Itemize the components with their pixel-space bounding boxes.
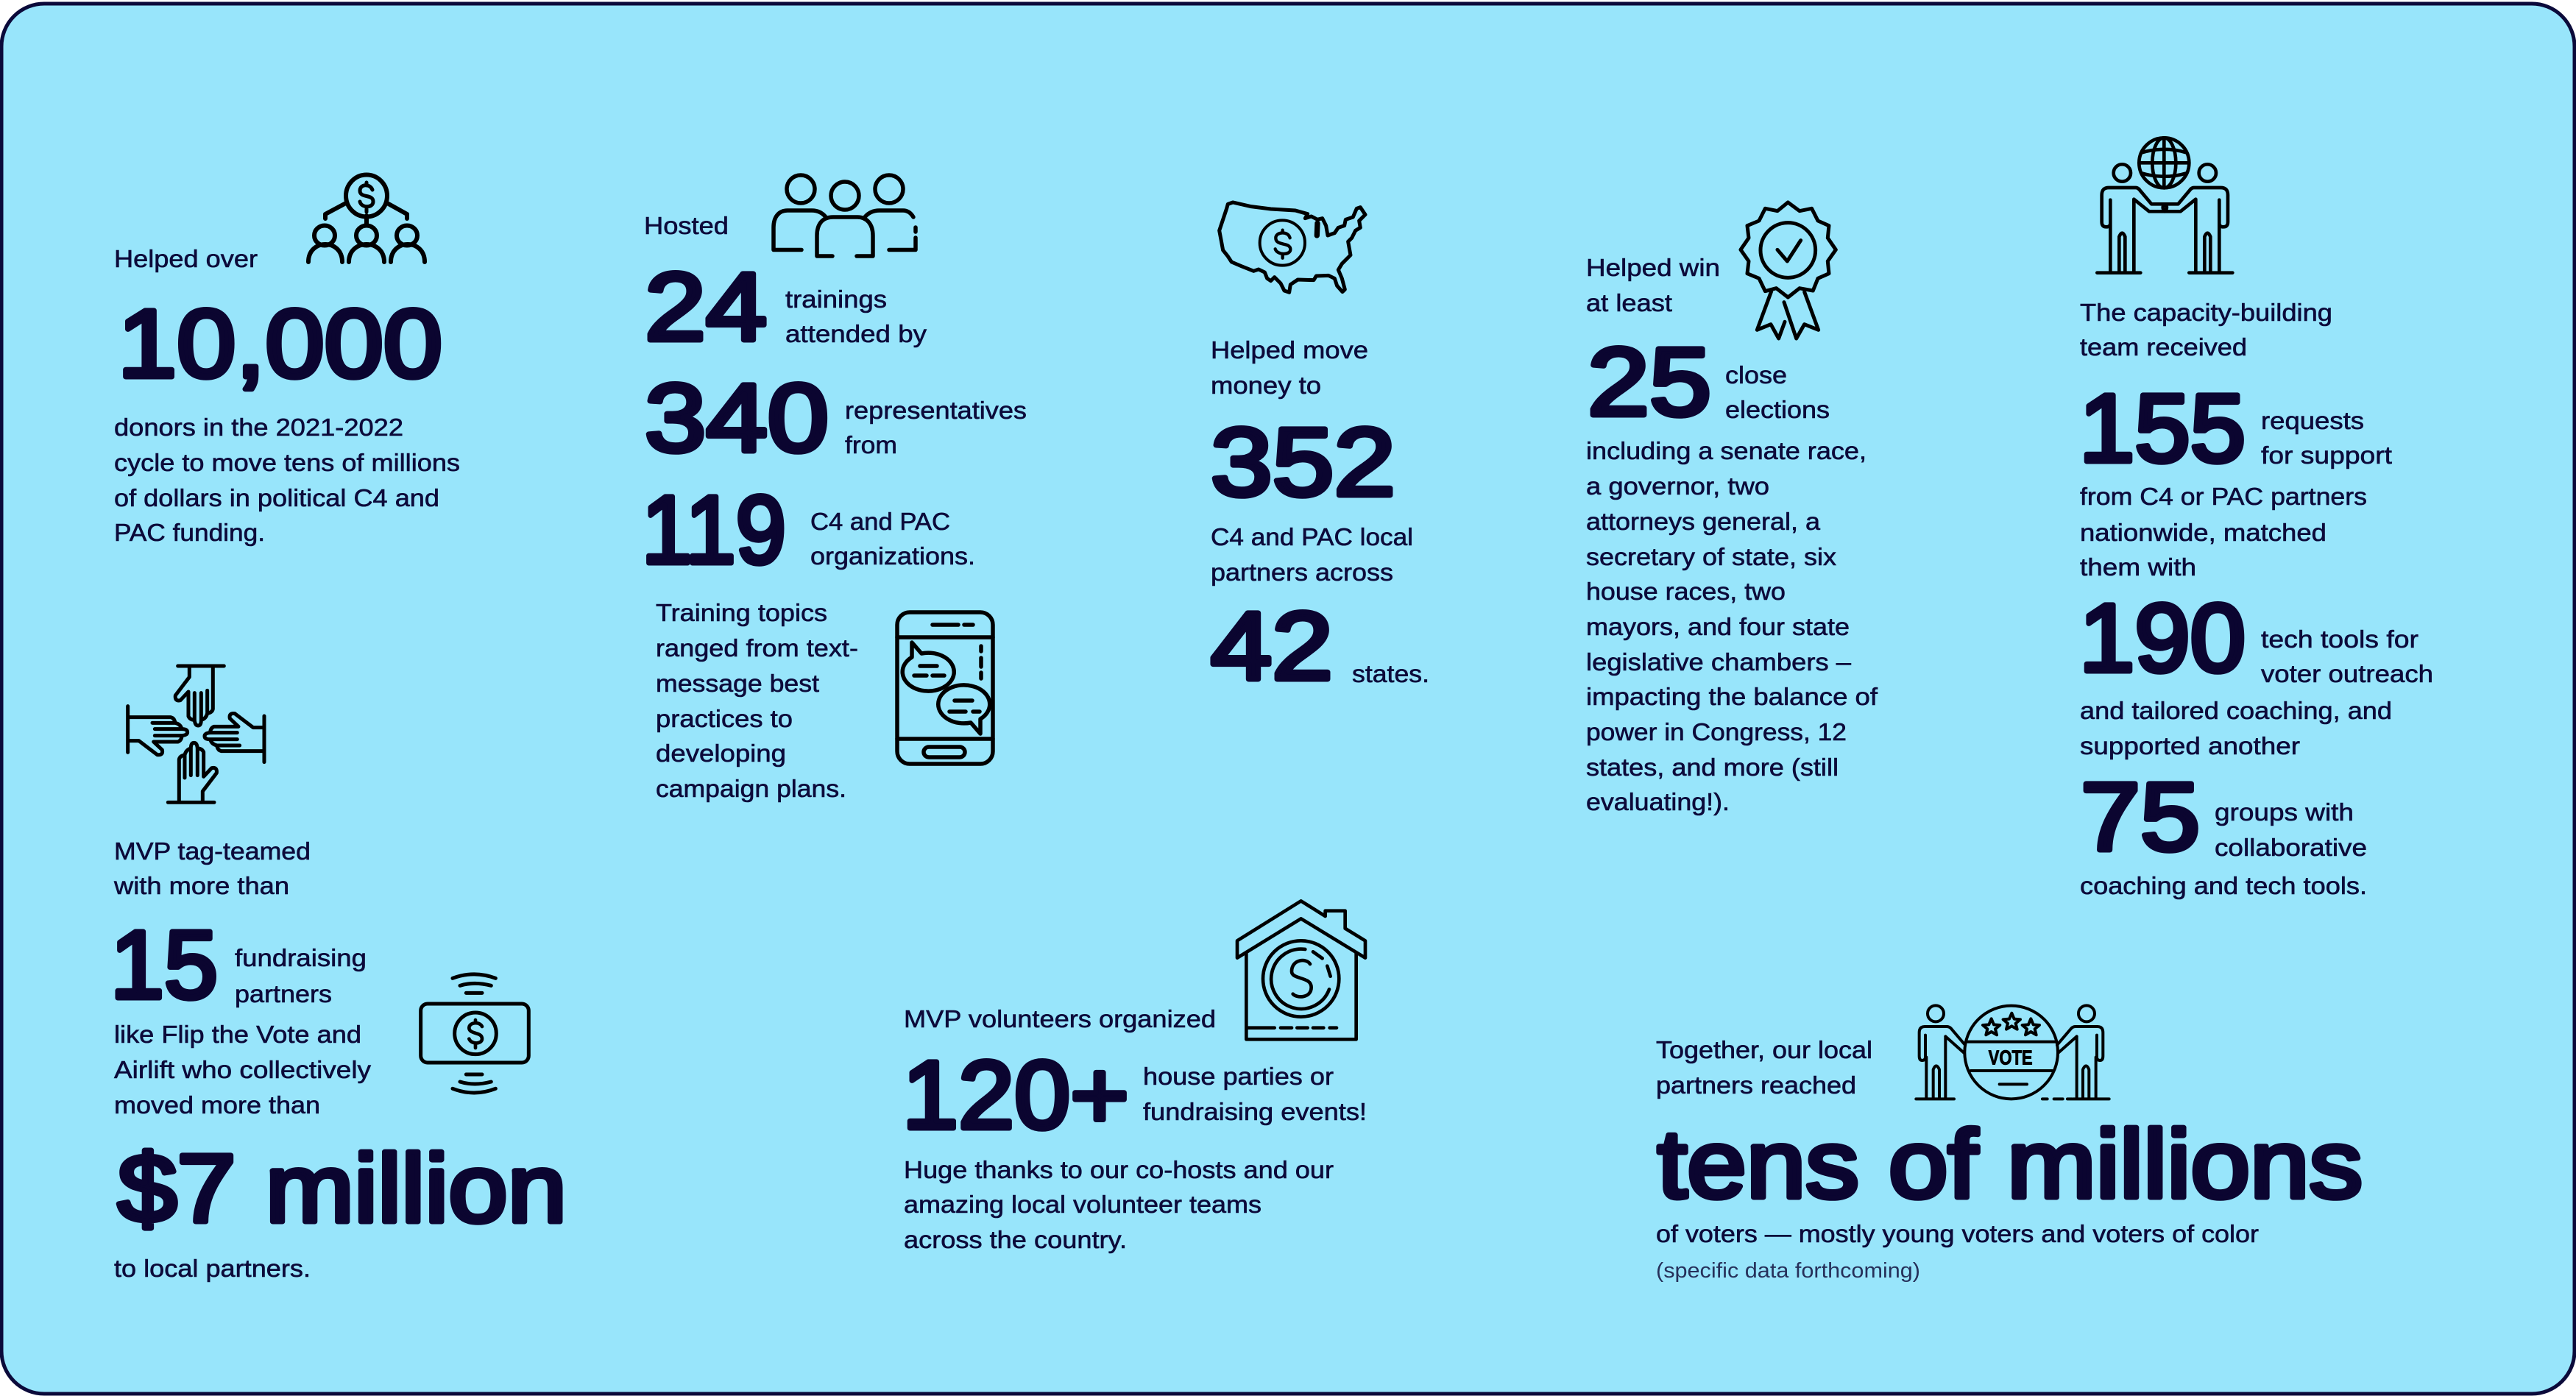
text: flip the vote	[114, 1021, 372, 1119]
text: from partners: nationwide, matched	[2080, 519, 2326, 546]
number: 340: 340	[645, 364, 829, 472]
block: house parties	[902, 901, 1367, 1253]
number: $7 million: $7 million	[118, 1134, 567, 1242]
text: tech tools for voter outreach: tech tools for	[2261, 626, 2418, 653]
text: training topics: message best	[656, 670, 819, 697]
text: tailored coaching: and tailored coaching, and	[2080, 697, 2392, 724]
text: MVP tag-teamed: with more than	[113, 872, 289, 899]
icon: donors with dollar coin	[308, 175, 425, 262]
text: donors description: PAC funding.	[114, 519, 265, 546]
text: from partners	[2080, 483, 2367, 581]
text: states: states.	[1352, 660, 1429, 687]
number: 190: 190	[2079, 584, 2246, 692]
text: specific data forthcoming: (specific data forthcoming)	[1656, 1259, 1920, 1283]
text: elections description: states, and more (still	[1586, 754, 1839, 781]
text: elections description: legislative chambers –	[1586, 648, 1852, 676]
text: elections description: attorneys general, a	[1586, 508, 1821, 535]
block: trainings	[642, 175, 1027, 802]
text: fundraising partners: partners	[235, 980, 332, 1007]
number: 155: 155	[2079, 374, 2246, 482]
icon: four hands	[128, 666, 264, 802]
text: local partners across: partners across	[1211, 559, 1393, 586]
text: elections description: house races, two	[1586, 578, 1786, 605]
icon: people holding vote badge	[1916, 1005, 2109, 1099]
icon: people holding vote badge: VOTE	[1989, 1046, 2033, 1069]
text: elections description: secretary of state, six	[1586, 543, 1837, 570]
text: donors description: of dollars in political C4 and	[114, 484, 439, 511]
text: C4 and PAC organizations	[810, 508, 975, 570]
number: 352: 352	[1211, 408, 1395, 516]
text: local partners across	[1211, 523, 1413, 586]
text: local partners across: C4 and PAC local	[1211, 523, 1413, 550]
text: representatives from	[845, 397, 1027, 458]
text: close elections: elections	[1725, 396, 1830, 423]
text: MVP volunteers organized: MVP volunteers organized	[904, 1005, 1216, 1032]
number: tens of millions: tens of millions	[1657, 1110, 2363, 1218]
text: of voters: of voters — mostly young voters and voters of color	[1656, 1220, 2259, 1247]
text: capacity-building team received	[2080, 299, 2332, 361]
block: capacity building	[2079, 138, 2433, 899]
text: elections description: a governor, two	[1586, 472, 1769, 500]
text: requests for support: requests	[2261, 407, 2364, 434]
number: 42: 42	[1211, 592, 1333, 700]
text: together our local partners reached	[1656, 1036, 1872, 1099]
text: representatives from: representatives	[845, 397, 1027, 424]
text: tailored coaching	[2080, 697, 2392, 759]
icon: phone with chat bubbles	[897, 612, 993, 764]
text: flip the vote: like Flip the Vote and	[114, 1021, 361, 1048]
text: helped win at least: Helped win	[1586, 254, 1720, 281]
number: 10,000: 10,000	[118, 289, 442, 397]
text: trainings attended by: trainings	[785, 286, 887, 313]
text: fundraising partners	[235, 944, 367, 1007]
icon: US map with dollar	[1220, 202, 1365, 292]
text: together our local partners reached: Together, our local	[1656, 1036, 1872, 1063]
block: fundraising partners	[110, 666, 567, 1282]
text: training topics: campaign plans.	[656, 775, 846, 802]
icon: award rosette with check	[1741, 202, 1836, 339]
text: training topics: practices to	[656, 705, 793, 732]
block: elections	[1586, 202, 1878, 815]
text: donors description: cycle to move tens of millions	[114, 449, 460, 476]
icon: house with coin	[1237, 901, 1365, 1039]
text: flip the vote: moved more than	[114, 1091, 320, 1119]
icon: two people shaking hands under a globe	[2097, 138, 2232, 273]
text: MVP tag-teamed	[113, 837, 311, 899]
text: C4 and PAC organizations: C4 and PAC	[810, 508, 950, 535]
number: 24: 24	[645, 252, 767, 361]
text: helped win at least: at least	[1586, 289, 1672, 316]
text: close elections: close	[1725, 361, 1787, 389]
text: requests for support	[2261, 407, 2392, 469]
text: tailored coaching: supported another	[2080, 732, 2300, 759]
text: helped win at least	[1586, 254, 1720, 316]
number: 119: 119	[642, 475, 786, 584]
text: groups with collaborative: collaborative	[2215, 834, 2367, 861]
text: groups with collaborative: groups with	[2215, 798, 2354, 826]
number: 120+: 120+	[902, 1041, 1129, 1149]
text: house parties or fundraising events: fundraising events!	[1143, 1098, 1367, 1125]
number: 25: 25	[1588, 327, 1711, 436]
text: together our local partners reached: partners reached	[1656, 1071, 1856, 1099]
text: trainings attended by	[785, 286, 927, 347]
number: 15: 15	[110, 910, 218, 1018]
text: C4 and PAC organizations: organizations.	[810, 542, 975, 570]
text: helped move money to: money to	[1211, 372, 1321, 399]
text: capacity-building team received: team received	[2080, 333, 2247, 361]
text: helped move money to: Helped move	[1211, 336, 1368, 364]
text: training topics: developing	[656, 740, 786, 767]
text: elections description: impacting the balance of	[1586, 683, 1878, 710]
text: fundraising partners: fundraising	[235, 944, 367, 971]
text: tech tools for voter outreach	[2261, 626, 2433, 687]
text: elections description: mayors, and four state	[1586, 613, 1850, 640]
text: coaching and tech tools: coaching and tech tools.	[2080, 872, 2367, 899]
text: helped move money to	[1211, 336, 1368, 399]
text: tech tools for voter outreach: voter outreach	[2261, 660, 2433, 687]
text: flip the vote: Airlift who collectively	[114, 1056, 372, 1083]
text: representatives from: from	[845, 431, 897, 458]
text: donors description	[114, 414, 460, 546]
icon: wireless money transfer	[421, 974, 528, 1093]
text: to local partners: to local partners.	[114, 1255, 311, 1282]
text: trainings attended by: attended by	[785, 320, 927, 347]
text: from partners: from C4 or PAC partners	[2080, 483, 2367, 510]
text: training topics	[656, 599, 858, 802]
text: helped over: Helped over	[114, 245, 258, 272]
text: hosted: Hosted	[644, 212, 729, 239]
text: house parties or fundraising events	[1143, 1063, 1367, 1125]
text: close elections	[1725, 361, 1830, 423]
text: house parties or fundraising events: house parties or	[1143, 1063, 1334, 1090]
text: elections description: power in Congress, 12	[1586, 718, 1847, 745]
block: voters reached	[1656, 1005, 2363, 1283]
block: money moved	[1211, 202, 1429, 700]
text: MVP tag-teamed: MVP tag-teamed	[114, 837, 311, 865]
text: elections description	[1586, 437, 1878, 815]
text: donors description: donors in the 2021-2022	[114, 414, 403, 441]
text: capacity-building team received: The capacity-building	[2080, 299, 2332, 326]
block: donors	[114, 175, 460, 546]
text: huge thanks: Huge thanks to our co-hosts and our	[904, 1156, 1334, 1183]
text: requests for support: for support	[2261, 442, 2392, 469]
text: training topics: Training topics	[656, 599, 827, 626]
text: huge thanks: across the country.	[904, 1226, 1127, 1253]
number: 75: 75	[2081, 762, 2200, 871]
icon: group of people	[774, 175, 916, 256]
text: huge thanks	[904, 1156, 1334, 1253]
text: from partners: them with	[2080, 553, 2196, 581]
text: elections description: including a senate race,	[1586, 437, 1866, 464]
text: groups with collaborative	[2215, 798, 2367, 861]
text: elections description: evaluating!).	[1586, 788, 1730, 815]
text: training topics: ranged from text-	[656, 634, 858, 662]
text: huge thanks: amazing local volunteer teams	[904, 1191, 1262, 1218]
